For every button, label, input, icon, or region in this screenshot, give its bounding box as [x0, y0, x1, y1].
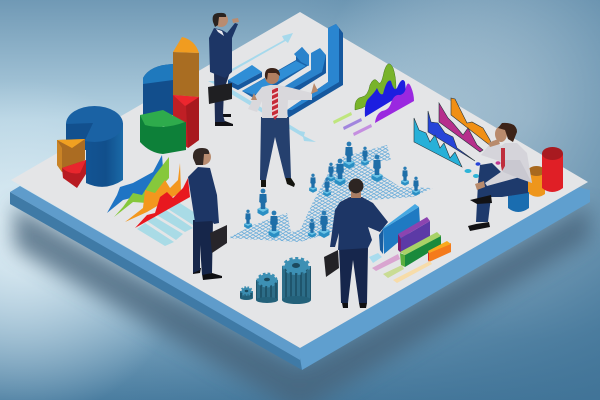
first bar: [228, 65, 262, 85]
big blue cylinder: [66, 123, 123, 187]
seat: [508, 192, 529, 212]
orange wedge: [57, 139, 85, 172]
chart: four spiky area charts: [414, 98, 500, 178]
head: [214, 13, 228, 27]
chart: right cylinders: [528, 147, 563, 197]
person: back view right with briefcase: [324, 178, 388, 308]
shoes: [261, 177, 295, 187]
red cylinder: [542, 154, 563, 192]
legend stripes: [369, 253, 382, 263]
arrow: downward light blue: [208, 81, 316, 142]
trousers: [339, 248, 368, 303]
orange cylinder: [528, 172, 545, 197]
platform left light lip: [10, 186, 300, 360]
lower leg and shoe: [468, 222, 490, 231]
suit jacket: [209, 23, 238, 78]
orange bar: [428, 252, 429, 262]
chart: left multicolour area chart: [107, 155, 200, 246]
platform shadow: [14, 204, 590, 400]
world map of dots: [228, 145, 433, 242]
trousers: [193, 220, 213, 275]
trousers: [476, 163, 528, 222]
shoes: [342, 303, 367, 308]
platform left dark edge: [10, 192, 302, 370]
legend dots: [464, 161, 500, 178]
red wedge: [62, 160, 86, 188]
tie: [272, 88, 278, 120]
platform right edge: [300, 187, 590, 370]
person: back view left with briefcase: [188, 148, 227, 280]
blue figures on pedestals: [244, 142, 420, 238]
person: seated thinker: [468, 123, 532, 231]
light blue stripes: [137, 200, 200, 246]
briefcase: [210, 225, 227, 253]
blue segment: [143, 64, 173, 115]
purple bar: [398, 234, 401, 253]
hands: [251, 83, 318, 100]
person: centre presenter: [248, 68, 318, 187]
trousers: [260, 117, 291, 180]
shoes: [215, 114, 233, 126]
trousers: [214, 72, 230, 122]
second bar with column: [242, 47, 309, 99]
shirt: [481, 140, 532, 186]
gears: [240, 259, 311, 304]
green bar: [400, 253, 405, 267]
large gear: [282, 259, 311, 304]
head: [195, 149, 211, 165]
chart: left cylinder pie: [57, 106, 123, 188]
chart: green blue purple area chart: [333, 64, 414, 136]
L shaped back wall: [287, 24, 343, 118]
red segment: [173, 95, 199, 148]
head: [495, 126, 507, 142]
green segment: [140, 115, 186, 154]
arrow: upward light blue: [230, 33, 293, 72]
head: [265, 70, 279, 84]
head: [348, 178, 364, 194]
legend stripes: [333, 112, 352, 124]
third bar with column: [282, 48, 326, 97]
suit jacket: [188, 167, 219, 224]
shirt: [248, 85, 312, 118]
person: standing top with spyglass pose: [208, 13, 239, 126]
chart: horizontal 3D bars: [369, 204, 451, 283]
orange segment: [173, 52, 199, 97]
blue bar: [379, 229, 383, 254]
chart: blue stepped isometric bars: [228, 24, 343, 118]
tie: [501, 148, 505, 171]
middle gear: [256, 274, 278, 303]
suit jacket: [330, 197, 388, 250]
shoes: [193, 268, 222, 280]
small gear: [240, 288, 253, 300]
briefcase: [324, 250, 339, 277]
upper shoe: [470, 195, 492, 204]
chart: tall stacked cylinder segments: [140, 37, 199, 154]
briefcase: [208, 83, 232, 104]
